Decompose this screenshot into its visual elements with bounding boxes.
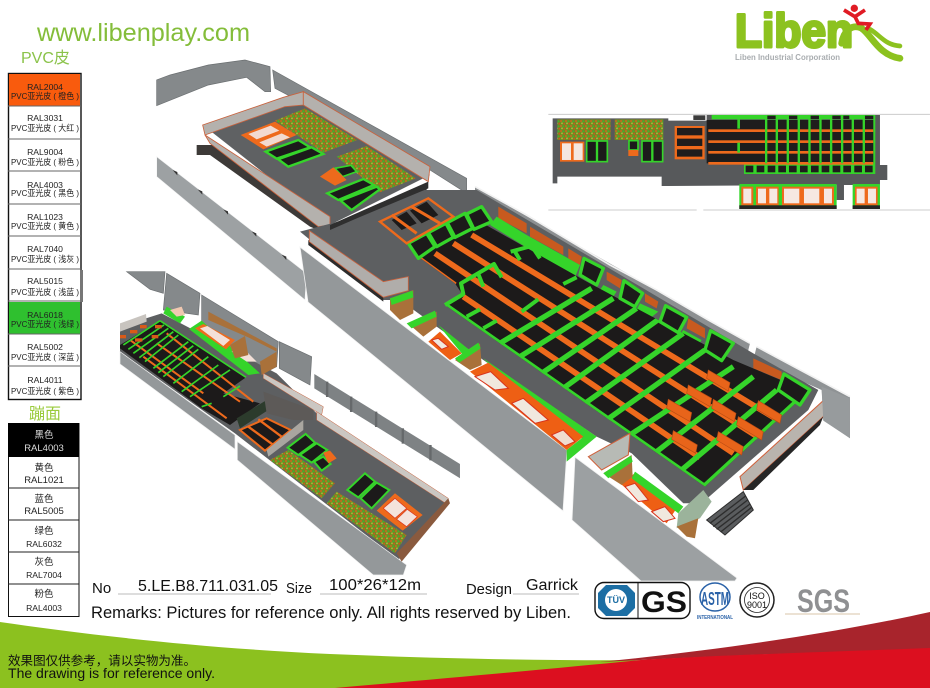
corner block	[677, 490, 712, 538]
panel: jump surface colour table: RAL6032	[26, 539, 62, 549]
footer note	[8, 653, 215, 681]
orange foam boxes	[667, 370, 782, 455]
front wall	[157, 157, 307, 300]
icon: ASTM: ASTM	[701, 589, 729, 609]
far wall trampolines	[408, 207, 810, 405]
glass fences	[203, 92, 430, 227]
deck underside	[197, 145, 427, 235]
panel: jump surface colour table: 黄色	[34, 462, 54, 474]
green trampolines	[266, 140, 380, 210]
footer note: The drawing is for reference only.	[8, 665, 215, 681]
deck edge underside	[308, 240, 383, 302]
floor	[120, 313, 448, 560]
panel: PVC colour table: PVC亚光皮 ( 大红 )	[11, 122, 79, 133]
orange steps	[320, 167, 347, 186]
wooden partitions	[390, 290, 633, 485]
panel: jump surface colour table: 黑色	[34, 429, 54, 441]
front wall lower	[572, 457, 737, 581]
central pit and gates	[237, 392, 313, 457]
trampoline grid	[120, 321, 260, 425]
central glass gate	[588, 433, 630, 470]
panel: PVC colour table: RAL4003	[27, 180, 63, 190]
lower deck fence	[309, 231, 408, 297]
upper deck 3D view	[157, 60, 467, 300]
green wall pads	[490, 217, 777, 393]
back glass fence	[263, 373, 448, 505]
panel: PVC colour table: PVC亚光皮 ( 黄色 )	[11, 220, 79, 231]
certification logos	[595, 582, 860, 621]
project info: Garrick	[526, 577, 578, 594]
panel: jump surface colour table	[8, 423, 79, 616]
back walls	[127, 272, 312, 385]
panel: jump surface colour table: 蓝色	[34, 493, 54, 505]
ball pits	[270, 450, 407, 553]
back wall	[475, 187, 850, 438]
panel: PVC colour table: PVC亚光皮 ( 紫色 )	[11, 385, 79, 396]
back walls	[157, 60, 467, 193]
right glass railing	[740, 396, 828, 490]
panel: jump surface colour table: RAL7004	[26, 570, 62, 580]
panel: PVC colour table: RAL5015	[27, 276, 63, 286]
wood partitions	[208, 312, 277, 375]
right edge	[397, 498, 450, 562]
heading: PVC skin: PVC皮	[21, 49, 70, 67]
logo: Liben: Liben Industrial Corporation	[735, 52, 840, 62]
icon: slide and child	[842, 5, 900, 58]
icon: ISO 9001: 9001	[747, 600, 767, 610]
orange pit	[380, 198, 453, 243]
project info	[92, 577, 579, 598]
project info: 100*26*12m	[329, 577, 421, 594]
icon: ISO 9001	[740, 583, 774, 617]
panel: PVC colour table: RAL6018	[27, 310, 63, 320]
upper deck drop	[330, 182, 428, 230]
panel: jump surface colour table: RAL5005	[24, 506, 64, 517]
panel: PVC colour table	[8, 74, 83, 400]
panel: jump surface colour table: RAL1021	[24, 475, 64, 486]
main hall 3D view	[300, 187, 850, 538]
panel: PVC colour table: PVC亚光皮 ( 浅灰 )	[11, 253, 79, 264]
panel: PVC colour table: PVC亚光皮 ( 黑色 )	[11, 187, 79, 198]
panel: PVC colour table: PVC亚光皮 ( 浅蓝 )	[11, 286, 79, 297]
left railing	[120, 314, 147, 332]
panel: PVC colour table: RAL9004	[27, 147, 63, 157]
green trampolines	[288, 434, 389, 508]
lower deck pit and fence	[308, 182, 453, 302]
project info: No	[92, 580, 111, 597]
panel: jump surface colour table: RAL4003	[24, 443, 64, 454]
hall floor	[300, 190, 818, 503]
panel: PVC colour table: RAL5002	[27, 342, 63, 352]
panel: PVC colour table: RAL1023	[27, 212, 63, 222]
deck underside	[743, 417, 823, 490]
icon: TUV GS: GS	[641, 586, 687, 619]
orange pads	[323, 451, 423, 531]
panel: jump surface colour table: 灰色	[34, 556, 54, 568]
panel: PVC colour table: PVC亚光皮 ( 橙色 )	[11, 90, 79, 101]
separate wall strip	[314, 374, 460, 478]
orange blocks	[120, 325, 162, 342]
icon: ASTM	[697, 583, 733, 621]
panel: jump surface colour table: 绿色	[34, 525, 54, 537]
deck floor	[205, 97, 430, 225]
end wall	[822, 387, 850, 438]
panel: jump surface colour table: 粉色	[34, 588, 54, 600]
footer note: 效果图仅供参考，请以实物为准。	[8, 653, 196, 668]
project info: Design	[466, 581, 512, 598]
icon: ASTM: INTERNATIONAL	[697, 615, 733, 621]
panel: PVC colour table: RAL2004	[27, 82, 63, 92]
panel: PVC colour table: PVC亚光皮 ( 深蓝 )	[11, 351, 79, 362]
heading: jump surface: 蹦面	[29, 405, 61, 423]
front wall upper	[300, 247, 567, 511]
icon: SGS: SGS	[797, 583, 850, 619]
ball pits	[275, 108, 416, 192]
panel: PVC colour table: RAL3031	[27, 113, 63, 123]
icon: TUV GS: TÜV	[607, 595, 625, 605]
court pads	[241, 122, 297, 149]
logo: Liben: Liben	[735, 4, 853, 57]
panel: PVC colour table: PVC亚光皮 ( 粉色 )	[11, 156, 79, 167]
panel: PVC colour table: RAL7040	[27, 244, 63, 254]
stepped block frames	[445, 246, 577, 328]
front mini courts	[428, 325, 683, 523]
logo: Liben	[735, 4, 900, 62]
icon: TUV GS	[595, 582, 690, 619]
project info: 5.LE.B8.711.031.05	[138, 578, 278, 595]
stairs	[707, 492, 753, 535]
left 3D view	[120, 272, 460, 575]
website url: www.libenplay.com	[36, 19, 250, 47]
remarks: Remarks: Pictures for reference only. All rights reserved by Liben.	[91, 603, 571, 622]
front walls	[120, 352, 407, 575]
orange wall pads	[498, 207, 782, 380]
panel: jump surface colour table: RAL4003	[26, 603, 62, 613]
back courts	[163, 307, 260, 375]
top view floor plan	[548, 114, 930, 210]
footer swoosh	[0, 612, 930, 688]
panel: PVC colour table: PVC亚光皮 ( 浅绿 )	[11, 318, 79, 329]
icon: ISO 9001: ISO	[749, 591, 765, 601]
trampoline grid	[417, 222, 808, 487]
panel: PVC colour table: RAL4011	[27, 375, 63, 385]
project info: Size	[286, 580, 312, 597]
